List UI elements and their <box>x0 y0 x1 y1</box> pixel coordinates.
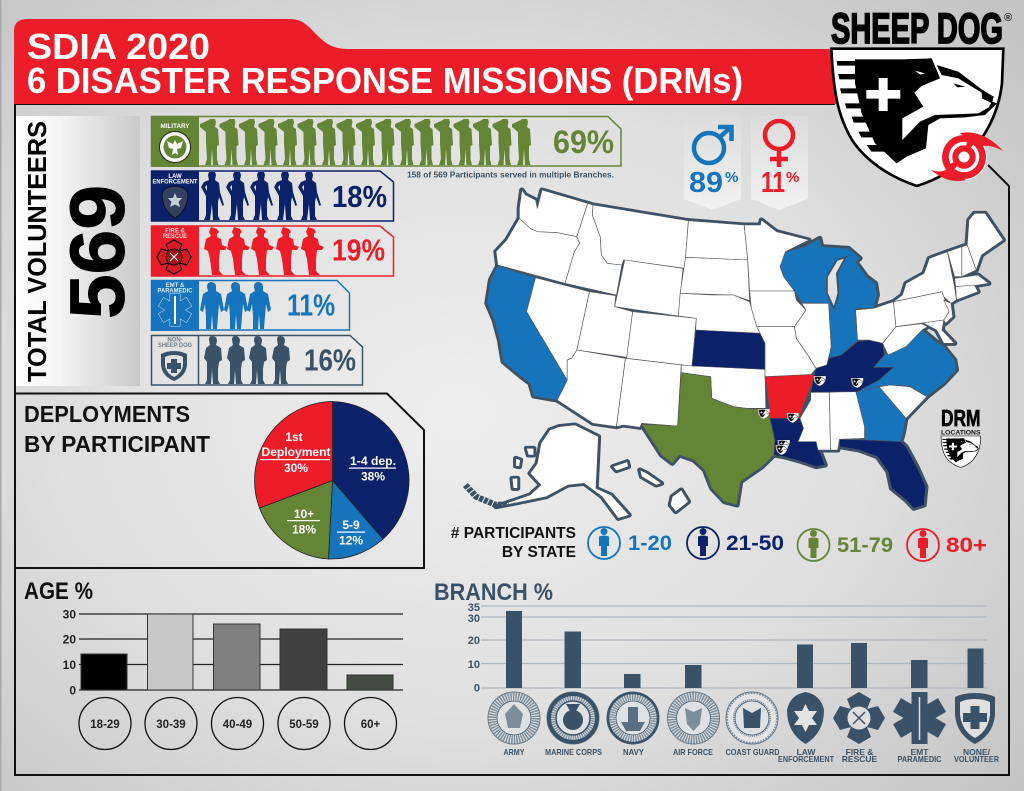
pie labels: 38% <box>361 470 385 484</box>
bar: law enforcement: ENFORCEMENT <box>152 180 198 186</box>
branch labels: PARAMEDIC <box>898 754 942 764</box>
pie labels: 30% <box>284 461 308 475</box>
bar: military <box>151 116 621 167</box>
branch labels: EMT <box>911 747 929 757</box>
chart: age: 60+ <box>361 719 381 731</box>
age labels <box>79 698 396 750</box>
bar: non sheep dog: SHEEP DOG <box>158 343 192 349</box>
bar: law enforcement: LAW <box>168 174 182 180</box>
title banner <box>14 19 836 104</box>
branch labels: NONE/ <box>963 747 991 757</box>
legend item: 1-20 <box>588 527 672 559</box>
heading: DEPLOYMENTS <box>24 401 190 427</box>
chart: branch: 20 <box>468 635 480 647</box>
legend item: 21-50 <box>687 527 784 559</box>
legend item: 80+: 80+ <box>946 534 987 557</box>
bar: law enforcement <box>151 170 394 222</box>
chart: branch: 0 <box>474 682 480 694</box>
chart: age: 0 <box>69 684 76 698</box>
paramedics <box>200 282 271 329</box>
officers <box>201 172 321 220</box>
bar: fire and rescue: 19% <box>332 232 385 268</box>
branch labels: FIRE & <box>846 747 873 757</box>
bar: law enforcement: 18% <box>332 179 387 214</box>
heading: BY PARTICIPANT <box>24 431 210 457</box>
chart: age: 40-49 <box>223 719 252 731</box>
branch labels <box>504 747 999 764</box>
pie labels <box>260 430 396 548</box>
chart: age: AGE % <box>24 578 93 605</box>
footnote: 158 of 569 Participants served in multiple Branches. <box>407 170 614 180</box>
title <box>27 26 743 101</box>
icon: military seal <box>160 132 190 162</box>
pie labels: 10+ <box>294 507 314 521</box>
pie labels: 5-9 <box>342 518 360 532</box>
branch labels: NAVY <box>623 747 644 757</box>
bar: fire and rescue <box>151 226 394 276</box>
chart: branch <box>434 579 999 764</box>
map: United States <box>465 190 1003 518</box>
icon: shield <box>161 351 187 381</box>
pie chart <box>255 402 409 559</box>
legend item: 1-20: 1-20 <box>628 532 672 555</box>
panel: male share: % <box>725 169 738 186</box>
bar: non sheep dog: NON- <box>167 338 183 344</box>
chart: age: 30-39 <box>156 719 186 731</box>
panel: female share: % <box>786 169 799 186</box>
bar: EMT and paramedic <box>151 280 350 331</box>
civilians <box>204 336 290 384</box>
branch labels: LAW <box>797 747 816 757</box>
bar: fire and rescue: RESCUE <box>163 234 187 240</box>
panel: male share <box>684 116 741 210</box>
branch labels: ARMY <box>504 747 525 757</box>
chart: branch: 35 <box>468 602 480 614</box>
branch icons <box>488 692 995 744</box>
soldiers <box>200 119 531 165</box>
icon: star of life <box>159 294 191 326</box>
callout: DRM locations key: LOCATIONS <box>941 430 981 436</box>
heading <box>24 401 210 457</box>
title: 6 DISASTER RESPONSE MISSIONS (DRMs) <box>27 60 743 101</box>
chart: age: 20 <box>63 632 76 646</box>
pie labels: 18% <box>292 522 316 536</box>
bar: EMT and paramedic: PARAMEDIC <box>158 288 193 294</box>
logo: sheep dog: ® <box>1004 12 1012 24</box>
chart: age: 18-29 <box>90 719 120 731</box>
icon: female symbol <box>765 121 793 167</box>
total number: 569 <box>55 185 141 319</box>
bar: military: 69% <box>553 124 614 160</box>
chart: age: 30 <box>63 608 76 622</box>
legend: participants by state: BY STATE <box>502 544 576 561</box>
panel: deployments by participant <box>15 394 424 568</box>
branch labels: ENFORCEMENT <box>778 754 835 764</box>
branch bars <box>506 611 984 688</box>
branch labels: MARINE CORPS <box>545 747 602 757</box>
chart: branch: BRANCH % <box>434 579 553 606</box>
icon: hurricane <box>931 132 1003 181</box>
panel: female share: 11 <box>761 167 785 199</box>
legend item: 51-79: 51-79 <box>837 534 893 557</box>
branch labels: RESCUE <box>842 754 878 764</box>
panel: male share: 89 <box>689 167 723 199</box>
pie labels: Deployment <box>262 445 330 459</box>
chart: branch: 10 <box>468 659 480 671</box>
bar: military: MILITARY <box>160 124 190 130</box>
legend: participants by state <box>451 525 987 561</box>
bar: EMT and paramedic: 11% <box>287 288 335 322</box>
callout: DRM locations key: DRM <box>941 405 980 431</box>
chart: branch: 30 <box>468 613 480 625</box>
panel: female share <box>751 116 808 210</box>
panel: total volunteers <box>16 116 141 386</box>
firefighters <box>204 227 324 275</box>
pie labels: 1st <box>285 430 303 444</box>
chart: age: 50-59 <box>289 719 319 731</box>
title: SDIA 2020 <box>27 26 210 67</box>
pie labels: 12% <box>339 534 363 548</box>
pie labels: 1-4 dep. <box>350 454 396 468</box>
icon: maltese cross <box>157 240 191 274</box>
markers: DRM locations <box>758 376 863 455</box>
chart: age <box>24 578 403 750</box>
icon: police badge <box>162 186 188 218</box>
legend item: 51-79 <box>798 529 893 561</box>
icon: male symbol <box>694 127 732 163</box>
age bars <box>81 614 393 690</box>
branch labels: VOLUNTEER <box>954 754 999 764</box>
legend item: 21-50: 21-50 <box>726 532 784 555</box>
branch labels: COAST GUARD <box>726 747 780 757</box>
bar: non sheep dog: 16% <box>304 342 356 378</box>
branch labels: AIR FORCE <box>673 747 713 757</box>
bar: EMT and paramedic: EMT & <box>166 283 185 289</box>
total volunteers label: TOTAL VOLUNTEERS <box>24 121 52 382</box>
logo: sheep dog <box>831 5 1012 186</box>
legend item: 80+ <box>907 529 987 561</box>
legend: participants by state: # PARTICIPANTS <box>451 525 576 542</box>
chart: age: 10 <box>63 658 76 672</box>
callout: DRM locations key <box>941 405 981 468</box>
bar: fire and rescue: FIRE & <box>165 228 185 234</box>
bar: non sheep dog <box>152 335 362 385</box>
